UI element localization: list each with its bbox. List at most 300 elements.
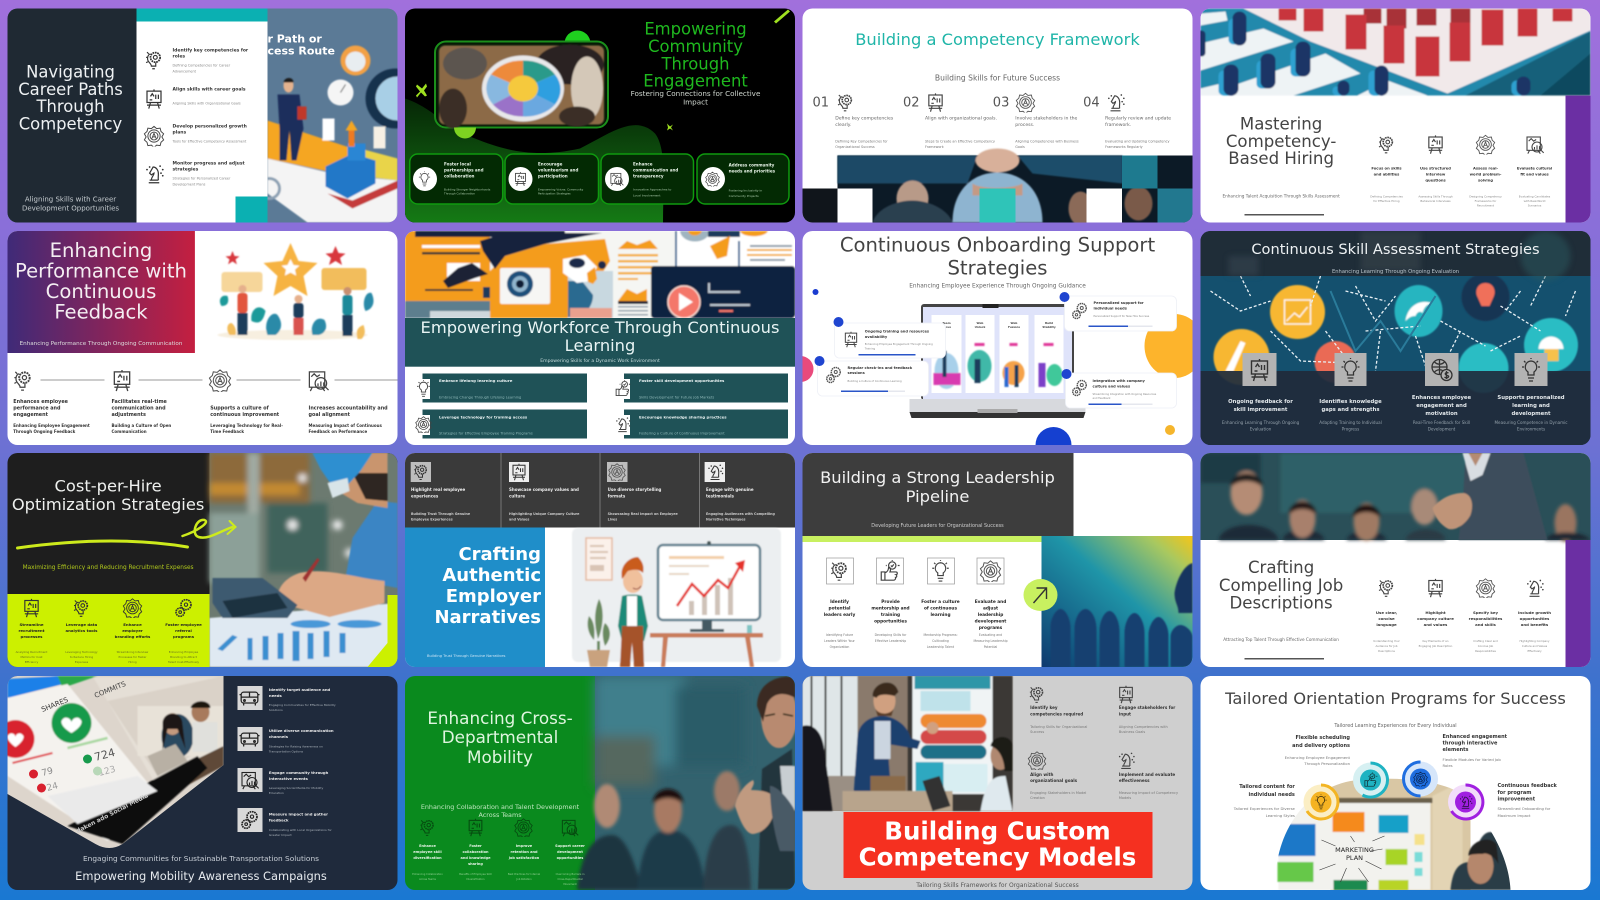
- subtitle: Impact: [683, 98, 708, 106]
- column: engagement and motivation: Development: [1428, 426, 1456, 432]
- item: communication channels: Utilize diverse communication: [269, 728, 334, 733]
- step 02: 02: [903, 96, 920, 110]
- column: referral programs: referral: [175, 628, 192, 633]
- callout: culture and values: [1062, 369, 1176, 408]
- column: cultural fit: Evaluating Candidates: [1519, 194, 1551, 198]
- item: lifelong learning culture: [415, 374, 587, 402]
- callout: personalized support: Personalized Support for New Hire Success: [1094, 314, 1150, 318]
- dark title band: [1200, 231, 1590, 281]
- subtitle: Aligning Skills with Career: [25, 196, 116, 204]
- item: growth plans: plans: [172, 130, 187, 136]
- column: development programs: Potential: [984, 645, 997, 649]
- photo: social media shares on paper: 79: [41, 766, 55, 779]
- card: local partnerships: collaboration: [444, 174, 475, 178]
- title: Crafting: [1248, 558, 1314, 577]
- column: employer branding: employer: [122, 628, 143, 633]
- card: local partnerships: Foster local: [444, 162, 471, 166]
- column: cultural fit: Scenarios: [1528, 204, 1542, 208]
- illustration: presenter with rising chart: [572, 528, 781, 667]
- item: monitor progress: Strategies for Personalized Career: [172, 176, 231, 180]
- column: employee experiences: [411, 462, 471, 522]
- column: employer branding: Enhance: [123, 622, 142, 627]
- item: lifelong learning culture: Embrace lifelong learning culture: [439, 378, 513, 383]
- column: culture and values: Highlight: [1425, 610, 1446, 615]
- column: responsibilities: [1469, 579, 1503, 653]
- laptop with web panels: Focus: [942, 325, 951, 329]
- item: monitor progress: Development Plans: [172, 182, 206, 186]
- callout: culture and values: and Feedback: [1092, 396, 1111, 400]
- item: identify competencies: [146, 48, 249, 74]
- white list panel: [136, 8, 268, 222]
- title: Crafting: [458, 544, 541, 565]
- column: responsibilities: Crafting Clear and: [1473, 639, 1498, 643]
- column: employer branding: Processes for Faster: [119, 655, 147, 659]
- column: problem solving: Assess real-: [1473, 166, 1498, 170]
- timeline item: accountability: Measuring Impact of Continuous: [308, 423, 382, 428]
- column: data analytics: to Reduce Hiring: [70, 655, 93, 659]
- subtitle: Engaging Communities for Sustainable Transportation Solutions: [83, 854, 319, 863]
- column: employer branding: Streamlining Interview: [117, 650, 149, 654]
- item: target audience: Identify target audience and: [269, 687, 331, 692]
- laptop with web panels: Team: [942, 321, 951, 325]
- label: enhanced engagement: [1442, 734, 1508, 768]
- photo: social media shares on paper: 24: [46, 781, 60, 794]
- subtitle: Enhancing Employee Experience Through Ongoing Guidance: [909, 284, 1086, 290]
- card: local partnerships: [410, 154, 503, 204]
- column: skill diversification: Enhance: [419, 844, 436, 848]
- column: storytelling formats: [607, 462, 679, 522]
- column: skill diversification: diversification: [413, 856, 442, 860]
- slide card: Crafting Authentic Employer Narratives: [405, 453, 795, 667]
- item: growth plans: Develop personalized growth: [172, 124, 247, 130]
- item: monitor progress: Monitor progress and adjust: [172, 160, 246, 166]
- label: enhanced engagement: Roles: [1442, 763, 1453, 768]
- title: Narratives: [434, 607, 541, 628]
- slide card: Navigating Career Paths Through Competency: [8, 8, 426, 222]
- title: Tailored Orientation Programs for Success: [1224, 689, 1566, 708]
- slide card: Building Custom Competency Models: [802, 676, 1192, 890]
- item: identify competencies: roles: [172, 54, 185, 60]
- column: problem solving: Recruitment: [1477, 204, 1495, 208]
- column: interviews: interview: [1426, 172, 1446, 176]
- column: responsibilities: Concise Job: [1478, 644, 1494, 648]
- step 04: Regularly review and update: [1105, 116, 1171, 122]
- timeline item: real-time communication: adjustments: [112, 412, 146, 418]
- column: collaboration: Diversification: [467, 877, 485, 881]
- column: development programs: development: [975, 618, 1006, 624]
- timeline item: accountability: Increases accountability and: [308, 406, 388, 412]
- column: growth opportunities: [1518, 580, 1551, 653]
- illustration: network of idea circles: [1200, 273, 1590, 393]
- column: interviews: Behavioral Interviews: [1420, 199, 1451, 203]
- item: lifelong learning culture: Embracing Change Through Lifelong Learning: [439, 396, 521, 400]
- ring: continuous feedback: [1448, 784, 1483, 820]
- subtitle: Tailored Learning Experiences for Every Individual: [1333, 723, 1457, 729]
- step 03: 03: [993, 96, 1009, 110]
- column: retention: retention and: [510, 850, 538, 854]
- item: align skills: Align skills with career goals: [172, 86, 246, 92]
- step 04: Evaluating and Updating Competency: [1105, 140, 1170, 144]
- label: continuous feedback: Continuous feedback: [1498, 783, 1558, 789]
- column: testimonials: Engage with genuine: [706, 487, 754, 492]
- column: skill diversification: Enhancing Collaboration: [412, 872, 443, 876]
- step 04: 04: [1083, 96, 1100, 110]
- column: development programs: Measuring Leadership: [973, 639, 1008, 643]
- title: Employer: [446, 586, 541, 607]
- column: cultural fit: Evaluate cultural: [1517, 166, 1552, 170]
- column: problem solving: solving: [1478, 178, 1493, 182]
- title: Cost-per-Hire: [55, 476, 162, 496]
- callout: personalized support: individual needs: [1094, 306, 1127, 310]
- subtitle: Enhancing Collaboration and Talent Development: [421, 803, 580, 811]
- column: company values: [509, 462, 580, 522]
- callout: check-ins and feedback: Building a Culture of Continuous Learning: [848, 379, 902, 383]
- column: interviews: [1418, 135, 1453, 203]
- item: identify competencies: Identify key competencies for: [172, 48, 249, 54]
- laptop with web panels: Build: [1045, 321, 1053, 325]
- laptop with web panels: [910, 304, 1086, 418]
- dark title panel: [8, 8, 136, 222]
- timeline item: accountability: [308, 372, 398, 434]
- column: retention: Improve: [516, 844, 533, 848]
- step 03: Goals: [1015, 145, 1025, 149]
- column: knowledge gaps: Identifies knowledge: [1319, 399, 1382, 405]
- framed photo: group around wheel chart: [435, 30, 608, 138]
- item: communication channels: channels: [269, 734, 289, 739]
- item: key competencies: Success: [1030, 730, 1044, 734]
- title: Building a Strong Leadership: [820, 468, 1055, 487]
- callout: culture and values: Streamlining Integration with Ongoing Resources: [1092, 392, 1157, 396]
- column: growth opportunities: opportunities: [1520, 616, 1550, 621]
- photo: social media shares on paper: SHARES: [40, 696, 70, 714]
- subtitle: Empowering Skills for a Dynamic Work Environment: [540, 358, 660, 364]
- column: knowledge gaps: gaps and strengths: [1321, 407, 1380, 413]
- step 03: [993, 93, 1079, 149]
- column: employer branding: branding efforts: [115, 634, 151, 639]
- laptop with web panels: Fusions: [1008, 325, 1020, 329]
- column: culture of learning: Cultivating: [932, 639, 949, 643]
- column: recruitment processes: [16, 599, 48, 664]
- title: Building a Competency Framework: [855, 30, 1140, 49]
- column: testimonials: [705, 462, 776, 522]
- column: engagement and motivation: engagement and: [1416, 403, 1467, 409]
- column: data analytics: [65, 600, 98, 664]
- step 04: framework.: [1105, 122, 1131, 128]
- item: monitor progress: strategies: [172, 166, 199, 172]
- column: ongoing feedback: Enhancing Learning Through Ongoing: [1222, 420, 1300, 425]
- callout: personalized support: Personalized support for: [1094, 301, 1144, 305]
- column: identify leaders: Leaders Within Your: [824, 639, 856, 643]
- column: skills: [1370, 137, 1403, 203]
- item: target audience: [238, 686, 336, 712]
- column: data analytics: Leverage data: [66, 622, 98, 627]
- label: flexible scheduling: Flexible scheduling: [1296, 735, 1350, 741]
- column: knowledge gaps: Adapting Training to Individual: [1319, 420, 1382, 425]
- accent line: [1244, 214, 1324, 216]
- step 03: Aligning Competencies with Business: [1015, 140, 1079, 144]
- column: recruitment processes: Efficiency: [25, 660, 39, 664]
- card: volunteerism: Participation Strategies: [538, 192, 571, 196]
- green background blob: [405, 98, 664, 222]
- column: recruitment processes: Metrics for Cost: [20, 655, 43, 659]
- subtitle: Building Skills for Future Success: [935, 74, 1060, 82]
- column: skills: and abilities: [1374, 172, 1400, 176]
- item: measure impact: Measure impact and gather: [269, 812, 328, 816]
- item: effectiveness: [1119, 753, 1178, 800]
- subtitle: Enhancing Performance Through Ongoing Communication: [20, 341, 183, 347]
- item: knowledge sharing: [615, 410, 788, 438]
- column: clear language: [1373, 580, 1401, 653]
- step 01: clearly.: [835, 122, 851, 128]
- purple side strip: [1566, 540, 1590, 667]
- timeline item: engagement: Enhances employee: [13, 399, 69, 405]
- blue title panel: [405, 528, 545, 667]
- item: identify competencies: Defining Competencies for Career: [172, 64, 231, 68]
- title: Empowering Mobility Awareness Campaigns: [75, 869, 327, 883]
- lower dark band: [1200, 371, 1590, 445]
- column: growth opportunities: Include growth: [1518, 610, 1551, 615]
- item: stakeholders: input: [1119, 712, 1131, 716]
- column: culture of learning: learning: [930, 612, 951, 618]
- column: culture of learning: Leadership Talent: [927, 645, 955, 649]
- column: collaboration: Benefits of Employee Skill: [459, 872, 492, 876]
- card: local partnerships: Building Stronger Neighborhoods: [444, 188, 491, 192]
- column: referral programs: Branding to Attract: [170, 655, 198, 659]
- column: interviews: Use structured: [1420, 166, 1451, 170]
- timeline item: engagement: Enhancing Employee Engagement: [13, 423, 90, 428]
- column: engagement and motivation: [1412, 353, 1472, 432]
- photo: man pointing in front of team: [577, 676, 797, 890]
- card: transparency: [601, 154, 694, 204]
- column: development programs: [973, 558, 1008, 649]
- photo: social media shares on paper: COMMITS: [93, 680, 128, 700]
- item: target audience: Engaging Communities for Effective Mobility: [269, 703, 336, 707]
- item: align skills: Aligning Skills with Organizational Goals: [172, 102, 241, 106]
- step 01: Define key competencies: [835, 116, 894, 122]
- step 01: Organizational Success: [835, 145, 875, 149]
- card: community needs: Fostering Inclusivity in: [729, 188, 762, 192]
- column: data analytics: analytics tools: [66, 628, 98, 633]
- illustration: people with star and speech bubbles: [218, 243, 374, 340]
- label: continuous feedback: for program: [1498, 790, 1531, 796]
- photo mosaic: people at screens: [802, 148, 1192, 226]
- title: Based Hiring: [1228, 149, 1334, 168]
- column: testimonials: testimonials: [706, 494, 734, 498]
- laptop with web panels: Web: [1011, 321, 1017, 325]
- item: knowledge sharing: Encourage knowledge sharing practices: [639, 414, 727, 420]
- column: career development: development: [557, 850, 583, 854]
- column: clear language: Audience for Job: [1375, 644, 1398, 648]
- column: clear language: Use clear,: [1376, 610, 1398, 615]
- item: key competencies: Identify key: [1030, 705, 1058, 710]
- item: communication channels: [238, 727, 334, 754]
- title: Compelling Job: [1219, 576, 1343, 595]
- photo: presenter beside marketing plan poster: [802, 676, 1012, 811]
- column: referral programs: programs: [173, 634, 195, 639]
- column: identify leaders: Identifying Future: [826, 633, 853, 637]
- subtitle: Fostering Connections for Collective: [631, 89, 761, 98]
- column: culture of learning: [921, 558, 960, 649]
- item: identify competencies: Advancement: [172, 70, 197, 74]
- column: responsibilities: responsibilities: [1469, 616, 1503, 621]
- column: identify leaders: Organization: [830, 645, 849, 649]
- callout: culture and values: culture and values: [1092, 384, 1130, 388]
- subtitle: Building Trust Through Genuine Narratives: [427, 654, 505, 658]
- column: retention: job satisfaction: [508, 856, 540, 860]
- column: development programs: programs: [979, 625, 1003, 631]
- purple side strip: [1566, 96, 1590, 222]
- teal title band: [405, 318, 795, 367]
- column: skill diversification: [412, 820, 443, 881]
- column: culture and values: and values: [1424, 622, 1448, 627]
- label: tailored content: Tailored Experiences for Diverse: [1233, 806, 1296, 811]
- item: effectiveness: Measuring Impact of Competency: [1119, 791, 1178, 795]
- column: testimonials: Engaging Audiences with Compelling: [706, 512, 776, 516]
- column: mentorship: opportunities: [874, 618, 907, 624]
- column: growth opportunities: Highlighting Company: [1520, 639, 1550, 643]
- column: development programs: Evaluate and: [975, 599, 1006, 605]
- callout: personalized support: [1060, 292, 1176, 331]
- callout: training and resources: [834, 317, 946, 358]
- label: flexible scheduling: [1285, 735, 1351, 766]
- column: storytelling formats: formats: [608, 494, 626, 498]
- item: technology for training: Strategies for Effective Employee Training Programs: [439, 432, 533, 436]
- title: Descriptions: [1230, 594, 1333, 612]
- timeline item: culture of improvement: Leveraging Technology for Real-: [210, 423, 283, 428]
- subtitle: Attracting Top Talent Through Effective Communication: [1223, 637, 1339, 642]
- gradient title panel: [8, 231, 195, 353]
- slide card: Cost-per-Hire Optimization Strategies: [8, 453, 398, 667]
- column: employee experiences: Employee Experiences: [411, 518, 453, 522]
- step 01: [812, 95, 894, 149]
- photo: engineer working at a calculator: [210, 453, 398, 667]
- laptop with web panels: Stability: [1042, 325, 1056, 329]
- item: growth plans: [144, 124, 247, 147]
- column: mentorship: Developing Skills for: [875, 633, 907, 637]
- column: personalized learning: [1495, 353, 1567, 432]
- photo: marketing plan whiteboard and presenter: PLAN: [1346, 854, 1363, 862]
- column: identify leaders: Identify: [830, 599, 849, 605]
- slide card: Empowering Community Through Engagement: [405, 8, 795, 222]
- slide card: Mastering Competency-Based Hiring: [1196, 8, 1590, 222]
- illustration: abstract face, camera and video tablet: [405, 231, 795, 318]
- timeline item: real-time communication: Building a Culture of Open: [112, 423, 171, 428]
- callout: training and resources: availability: [865, 335, 888, 339]
- column: engagement and motivation: Enhances employee: [1412, 395, 1472, 401]
- title: Empowering Workforce Through Continuous: [421, 318, 779, 337]
- title: Authentic: [442, 565, 541, 586]
- item: organizational goals: Align with: [1030, 772, 1053, 777]
- callout: culture and values: Integration with company: [1092, 379, 1146, 383]
- column: storytelling formats: Showcasing Real Impact on Employee: [608, 512, 679, 516]
- column: identify leaders: [824, 558, 856, 649]
- title: Continuous Skill Assessment Strategies: [1251, 241, 1540, 258]
- column: culture of learning: Mentorship Programs:: [924, 633, 958, 637]
- step 04: [1083, 94, 1171, 149]
- slide card: Continuous Onboarding Support Strategies: [788, 231, 1204, 463]
- column: retention: [508, 819, 540, 881]
- step 02: Framework: [925, 145, 944, 149]
- card: transparency: transparency: [633, 174, 664, 178]
- column: growth opportunities: Culture and Values: [1522, 644, 1548, 648]
- column: culture and values: company culture: [1417, 616, 1454, 621]
- title: Performance with: [15, 260, 187, 282]
- title: Career Paths: [18, 80, 123, 99]
- column: ongoing feedback: [1222, 353, 1300, 432]
- column: employee experiences: experiences: [411, 494, 439, 498]
- title: Competency: [19, 114, 123, 134]
- item: interactive events: Education: [269, 791, 284, 795]
- column: interviews: questions: [1425, 178, 1446, 182]
- laptop with web panels: Unlock: [975, 325, 985, 329]
- title: Community: [648, 37, 743, 56]
- label: tailored content: [1233, 784, 1296, 818]
- callout: check-ins and feedback: Regular check-ins and feedback: [848, 366, 913, 370]
- title: Continuous: [46, 280, 156, 303]
- title: Feedback: [54, 300, 148, 324]
- column: clear language: Understanding Your: [1373, 639, 1401, 643]
- column: personalized learning: Supports personalized: [1497, 395, 1565, 401]
- item: measure impact: feedback: [269, 818, 289, 822]
- timeline item: real-time communication: [112, 370, 202, 434]
- column: interviews: Assessing Skills Through: [1418, 194, 1453, 198]
- title: Mastering: [1240, 114, 1322, 134]
- column: ongoing feedback: Evaluation: [1250, 426, 1272, 432]
- lime arrow badge: [1024, 579, 1058, 611]
- card: volunteerism: Empowering Voices: Community: [538, 188, 584, 192]
- item: target audience: Solutions: [269, 708, 283, 712]
- label: enhanced engagement: through interactive: [1442, 740, 1498, 746]
- column: skills: for Effective Hiring: [1373, 199, 1400, 203]
- title: Enhancing Cross-: [427, 708, 573, 728]
- timeline item: culture of improvement: Supports a culture of: [210, 406, 270, 412]
- slide card: Continuous Skill Assessment Strategies: [1200, 231, 1590, 445]
- label: continuous feedback: improvement: [1498, 796, 1536, 802]
- item: key competencies: competencies required: [1030, 712, 1083, 716]
- card: volunteerism: participation: [538, 174, 568, 178]
- photo: social media shares on paper: 724: [93, 746, 117, 764]
- dark title panel: [802, 453, 1074, 536]
- item: interactive events: Engage community through: [269, 770, 329, 775]
- slide card: Crafting Compelling Job Descriptions: [1200, 453, 1590, 667]
- column: data analytics: Expenses: [75, 660, 89, 664]
- subtitle: Maximizing Efficiency and Reducing Recruitment Expenses: [23, 565, 194, 571]
- title: Learning: [565, 336, 635, 355]
- item: measure impact: Greater Impact: [269, 833, 292, 837]
- column: career development: Cross-Departmental: [557, 877, 583, 881]
- column: mentorship: Provide: [881, 599, 900, 605]
- column: clear language: language: [1376, 622, 1397, 627]
- step 02: Steps to Create an Effective Competency: [925, 140, 995, 144]
- column: problem solving: Frameworks for: [1475, 199, 1497, 203]
- column: company values: Highlighting Unique Company Culture: [509, 512, 580, 516]
- timeline item: culture of improvement: continuous improvement: [210, 412, 280, 418]
- column: identify leaders: leaders early: [824, 612, 856, 618]
- column: collaboration: collaboration: [462, 850, 489, 854]
- item: stakeholders: [1119, 686, 1175, 734]
- subtitle: Development Opportunities: [22, 204, 119, 212]
- timeline item: accountability: goal alignment: [308, 412, 351, 418]
- card: transparency: Enhance: [633, 162, 653, 166]
- column: knowledge gaps: Progress: [1342, 426, 1359, 432]
- label: continuous feedback: [1498, 783, 1558, 818]
- column: data analytics: Leveraging Technology: [65, 650, 98, 654]
- slide card: Tailored Orientation Programs for Success: [1200, 676, 1590, 890]
- column: cultural fit: [1517, 137, 1552, 208]
- column: retention: Best Practices for Internal: [508, 872, 540, 876]
- label: tailored content: Tailored content for: [1239, 784, 1295, 790]
- column: growth opportunities: Effectively: [1527, 649, 1542, 653]
